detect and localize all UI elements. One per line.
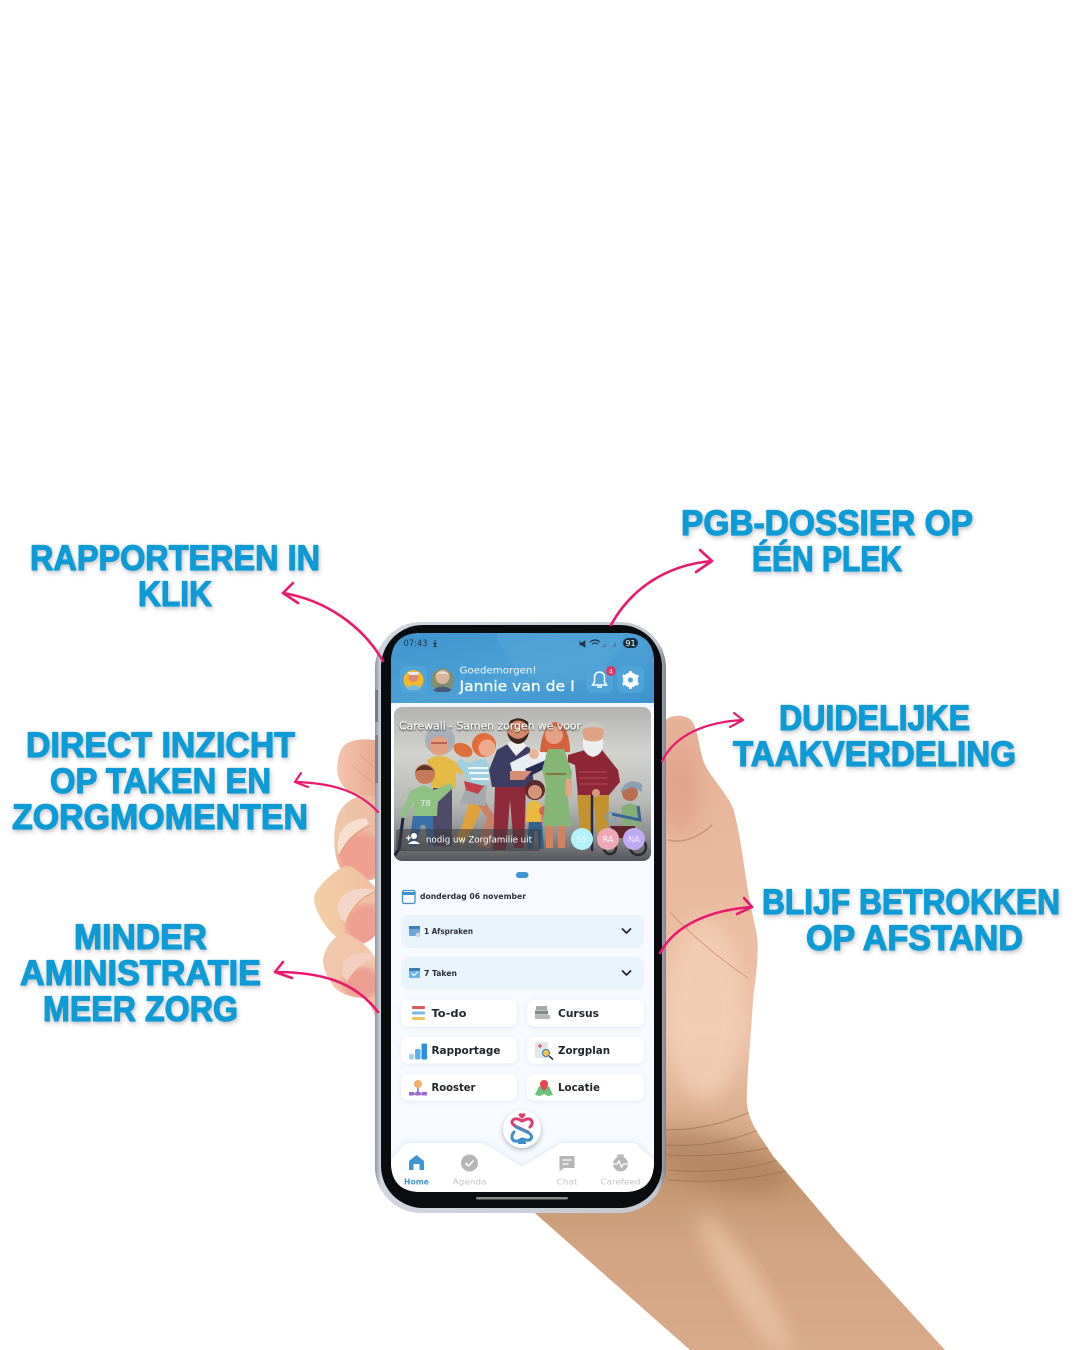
arrow: blijf betrokken [660, 898, 752, 953]
row: appointments: 1 Afspraken [424, 927, 473, 936]
arrow: duidelijke taakverdeling [662, 713, 743, 761]
icon: appointments [409, 926, 420, 938]
bottom navigation: Carefeed [600, 1178, 641, 1186]
arrow: minder administratie [275, 962, 378, 1012]
label: minder administratie: MINDER [74, 917, 207, 957]
status bar [404, 638, 638, 649]
icon: calendar [402, 890, 415, 904]
label: rapporteren [30, 538, 320, 614]
screen [391, 633, 654, 1192]
invite bar [396, 829, 541, 851]
date row [402, 890, 526, 904]
button: locatie: Locatie [558, 1081, 600, 1094]
member avatars: RA [603, 835, 614, 844]
little girl with doll [525, 780, 545, 849]
user name: Jannie van de M [458, 679, 584, 695]
icon: tasks [409, 968, 420, 978]
hand: fingers [314, 739, 375, 1016]
status bar: 07:43 [404, 639, 428, 649]
father with baby [489, 718, 546, 850]
label: direct inzicht: OP TAKEN EN [50, 761, 271, 801]
label: duidelijke taakverdeling: DUIDELIJKE [779, 698, 970, 738]
phone bezel [381, 625, 662, 1208]
member avatars [571, 828, 645, 850]
arrow: direct inzicht [295, 773, 378, 812]
arrow: rapporteren [283, 583, 383, 661]
logo button [503, 1110, 541, 1148]
label: pgb-dossier: ÉÉN PLEK [752, 539, 902, 579]
grandmother [425, 725, 466, 846]
label: direct inzicht [12, 725, 308, 837]
grandson in green shirt: 78 [420, 799, 431, 808]
ring finger [314, 866, 375, 944]
date row: donderdag 06 november [420, 892, 526, 901]
icon: carefeed [612, 1154, 628, 1172]
carewall banner [394, 707, 651, 861]
label: minder administratie: AMINISTRATIE [20, 953, 261, 993]
boy on tricycle [604, 781, 646, 855]
button: rapportage [400, 1044, 518, 1065]
icon: agenda [461, 1154, 478, 1172]
bottom navigation: Agenda [452, 1178, 486, 1186]
label: direct inzicht: ZORGMOMENTEN [12, 797, 308, 837]
icon: chat [560, 1156, 574, 1172]
label: blijf betrokken: OP AFSTAND [806, 918, 1023, 958]
page indicator [516, 872, 528, 878]
bottom navigation [391, 1143, 654, 1193]
label: pgb-dossier: PGB-DOSSIER OP [681, 503, 973, 543]
label: rapporteren: RAPPORTEREN IN [30, 538, 320, 578]
label: duidelijke taakverdeling: TAAKVERDELING [733, 734, 1016, 774]
label: direct inzicht: DIRECT INZICHT [26, 725, 295, 765]
label: minder administratie [20, 917, 261, 1029]
label: duidelijke taakverdeling [733, 698, 1016, 774]
icon: settings gear [617, 666, 644, 693]
label: pgb-dossier [681, 503, 973, 579]
index finger [337, 739, 382, 802]
button: locatie [527, 1074, 644, 1100]
bottom navigation: Chat [556, 1178, 578, 1186]
hand: palm and arm [520, 716, 945, 1350]
button: zorgplan [526, 1042, 644, 1065]
button: cursus: Cursus [558, 1007, 599, 1020]
icon: notification bell [586, 666, 616, 693]
button: rapportage: Rapportage [432, 1044, 500, 1057]
banner title: Carewall - Samen zorgen we voor [399, 720, 582, 732]
family illustration [394, 718, 646, 856]
member avatars: NA [628, 835, 640, 844]
phone [375, 622, 666, 1213]
row: appointments [401, 915, 644, 948]
status bar: 91 [625, 639, 636, 648]
grandson in green shirt [394, 764, 453, 856]
greeting: Goedemorgen! [460, 666, 536, 676]
arrow: pgb-dossier [611, 550, 712, 625]
little finger [323, 934, 375, 1016]
icon: home [409, 1155, 424, 1170]
label: blijf betrokken [762, 882, 1060, 958]
icon: nurse avatar [400, 666, 426, 690]
label: minder administratie: MEER ZORG [43, 989, 238, 1029]
icon: senior avatar [431, 668, 454, 692]
invite bar: nodig uw Zorgfamilie uit [426, 836, 533, 846]
button: cursus [526, 1006, 644, 1028]
button: rooster: Rooster [432, 1081, 476, 1094]
member avatars: SS [577, 835, 587, 844]
grandfather [568, 722, 620, 851]
button: rooster [400, 1080, 518, 1102]
icon: notification bell: 4 [609, 668, 613, 676]
mother in green dress [540, 722, 572, 848]
button: to-do [400, 1006, 518, 1028]
label: rapporteren: KLIK [138, 574, 212, 614]
bottom navigation: Home [404, 1178, 429, 1186]
button: zorgplan: Zorgplan [558, 1044, 610, 1057]
phone frame [375, 622, 666, 1213]
row: tasks: 7 Taken [424, 969, 457, 978]
button: to-do: To-do [432, 1007, 467, 1020]
middle finger [334, 796, 375, 880]
home indicator [476, 1197, 568, 1200]
app header [391, 633, 654, 703]
row: tasks [401, 957, 644, 990]
girl with red hair [451, 733, 496, 848]
